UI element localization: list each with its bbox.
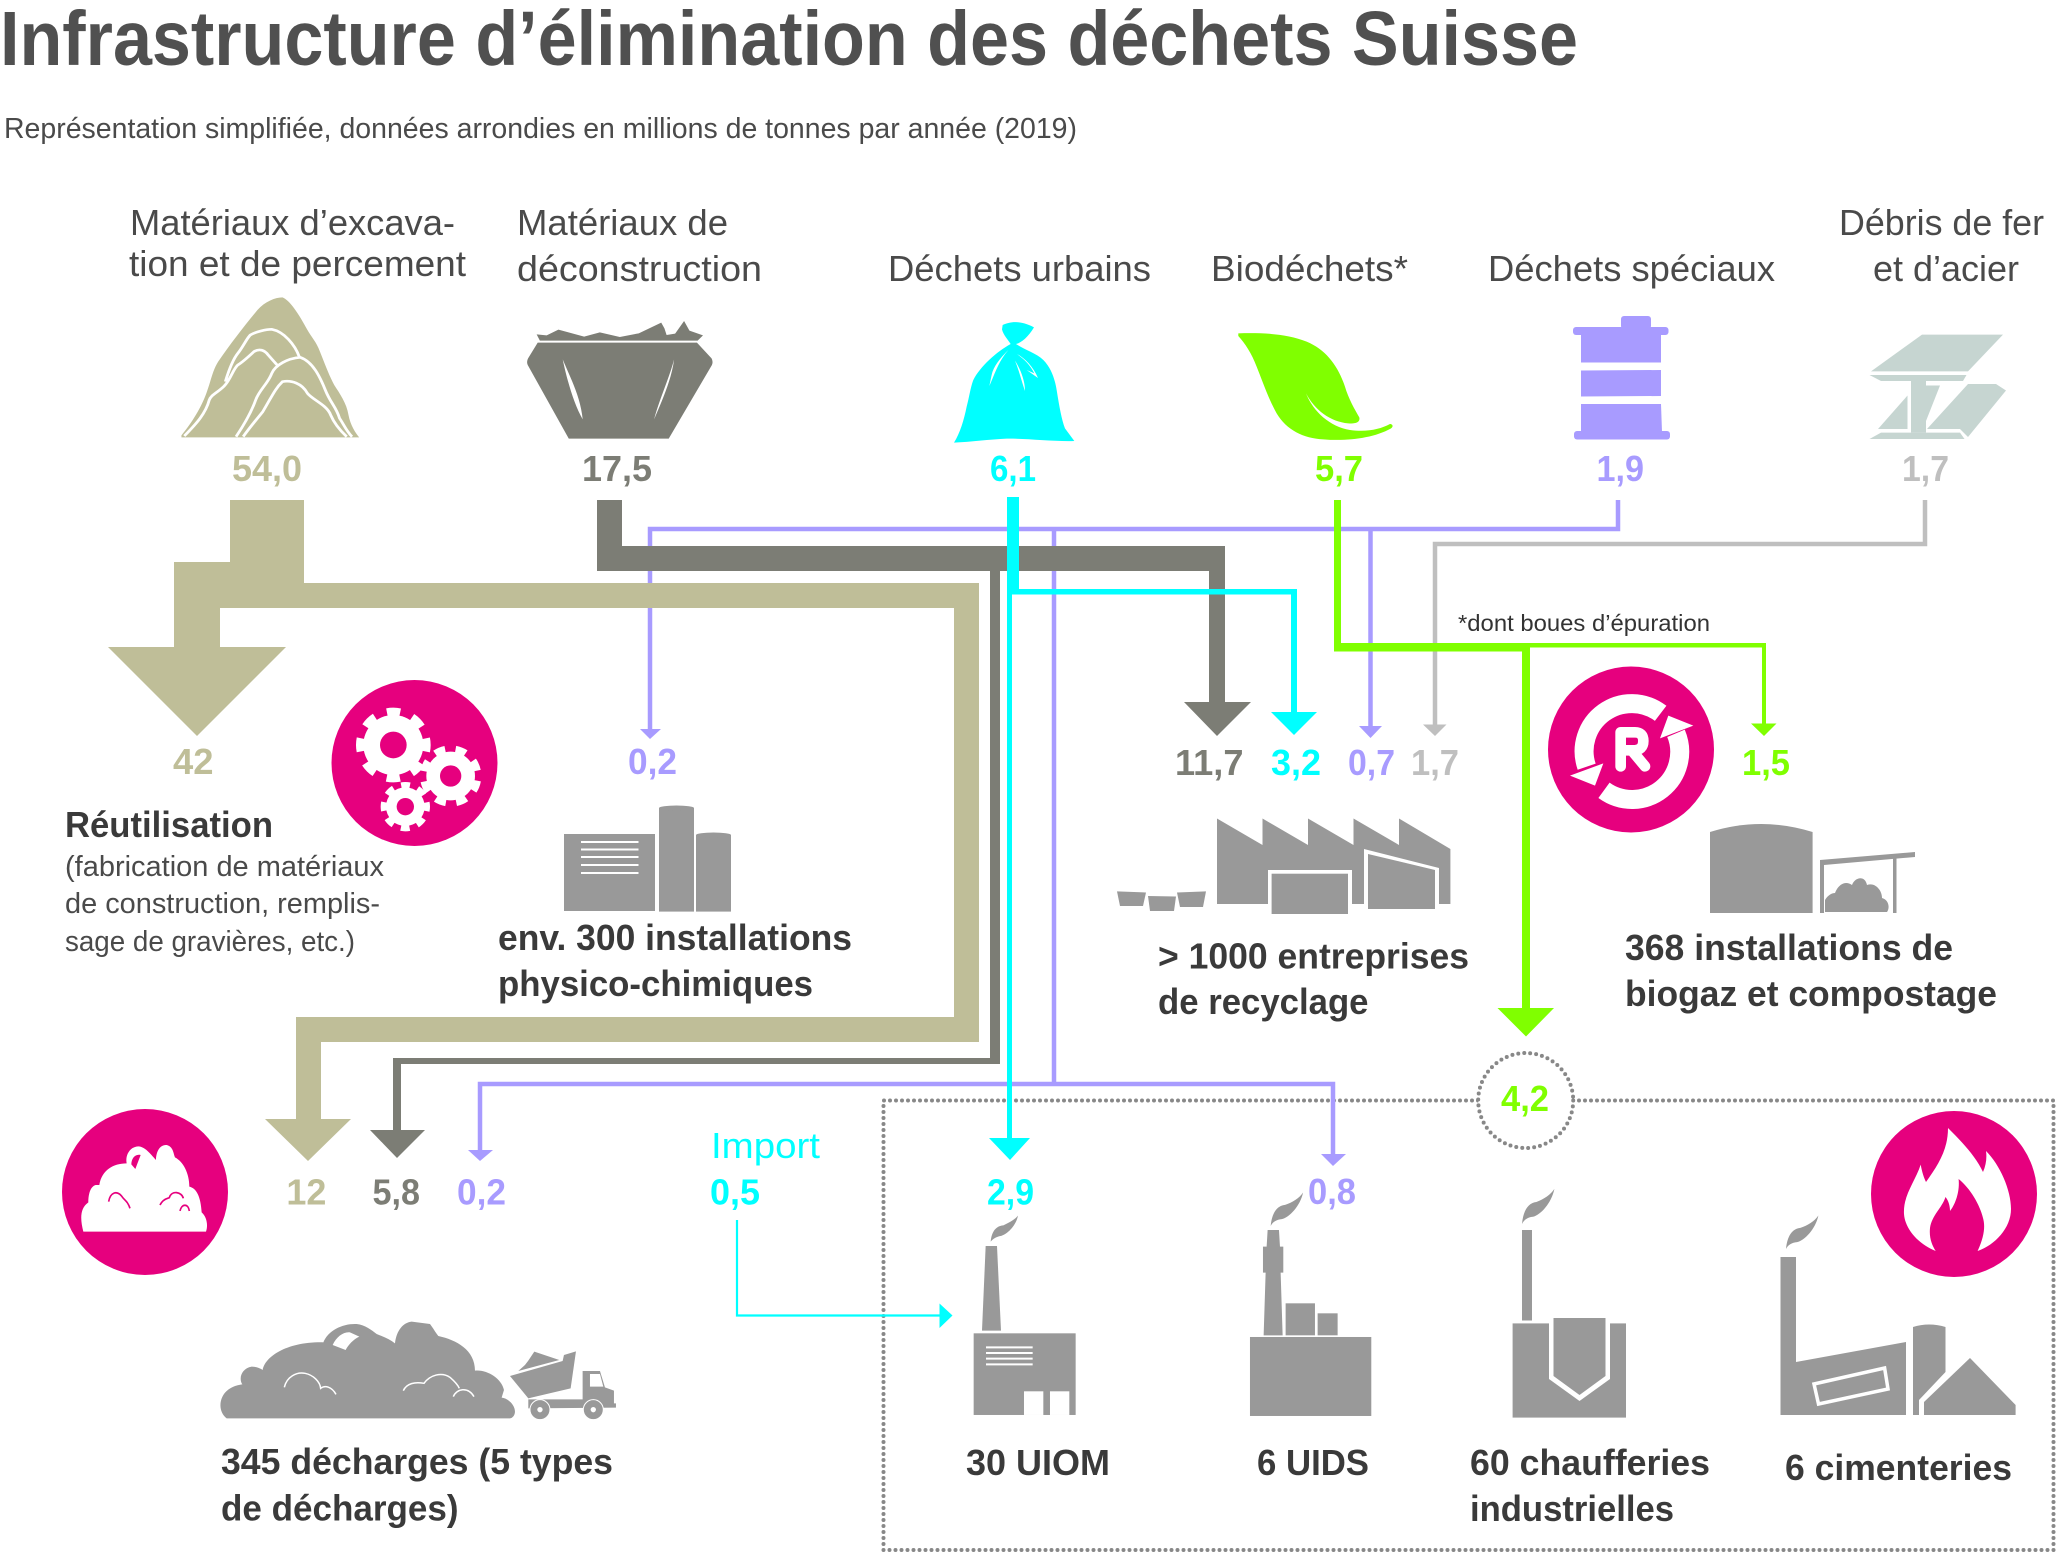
source: excavation materials: 54,0	[232, 448, 302, 489]
panel: industrial boilers	[1470, 1189, 1710, 1529]
flow arrow: deconstruction materials to landfill	[370, 571, 1000, 1158]
panel: recycling companies: 0,7	[1348, 742, 1395, 783]
icon: waste heap	[62, 1109, 228, 1275]
footnote: *dont boues d’épuration	[1458, 610, 1710, 636]
panel: biogas and composting: 1,5	[1742, 742, 1790, 783]
source: deconstruction materials: déconstruction	[517, 248, 762, 289]
panel: landfills: 0,2	[457, 1172, 506, 1212]
icon: boiler plant	[1513, 1189, 1626, 1418]
panel: physico-chemical plants: 0,2	[628, 741, 677, 782]
source: iron and steel scrap: et d’acier	[1873, 248, 2019, 289]
icon: leaf	[1238, 333, 1393, 440]
panel: UIOM: 30 UIOM	[966, 1442, 1110, 1483]
text block: reuse details: sage de gravières, etc.)	[65, 926, 355, 958]
panel: cement plants: 6 cimenteries	[1785, 1447, 2012, 1488]
text block: reuse details: (fabrication de matériaux	[65, 851, 384, 883]
panel: landfills: 5,8	[372, 1172, 420, 1212]
icon: chemical plant	[564, 806, 731, 912]
panel: recycling companies: de recyclage	[1158, 981, 1368, 1022]
panel: biogas and composting: 368 installations de	[1625, 927, 1953, 968]
panel: UIDS	[1250, 1171, 1371, 1483]
icon: mountain	[181, 297, 359, 437]
panel: landfills: 345 décharges (5 types	[221, 1441, 613, 1482]
panel: landfills: 12	[286, 1172, 326, 1212]
panel: UIDS: 6 UIDS	[1257, 1442, 1369, 1483]
panel: UIDS: 0,8	[1308, 1171, 1356, 1212]
panel: physico-chemical plants: env. 300 installations	[498, 917, 852, 958]
source: special waste: Déchets spéciaux	[1488, 248, 1775, 289]
source: deconstruction materials	[517, 202, 762, 489]
panel: recycling companies: 3,2	[1271, 742, 1321, 783]
source: special waste: 1,9	[1596, 448, 1644, 489]
subtitle: Représentation simplifiée, données arrondies en millions de tonnes par année (2019)	[4, 113, 1077, 145]
panel: reuse: 42	[173, 741, 214, 782]
source: biowaste: 5,7	[1315, 448, 1363, 489]
label: import	[710, 1125, 820, 1212]
flow arrow: import	[737, 1220, 952, 1328]
panel: reuse	[65, 680, 498, 958]
text block: reuse details	[65, 851, 384, 958]
source: urban waste	[888, 248, 1151, 489]
callout: thermal recovery 4,2: 4,2	[1501, 1078, 1549, 1119]
source: iron and steel scrap	[1839, 202, 2044, 489]
panel: recycling companies: 11,7	[1175, 742, 1244, 783]
source: biowaste	[1211, 248, 1408, 489]
panel: recycling companies: > 1000 entreprises	[1158, 936, 1469, 976]
source: biowaste: Biodéchets*	[1211, 248, 1408, 289]
panel: physico-chemical plants	[498, 741, 852, 1004]
flow arrow: excavation materials	[108, 500, 979, 1161]
flow arrows: special waste (lavender)	[468, 500, 1618, 1166]
panel: industrial boilers: 60 chaufferies	[1470, 1442, 1710, 1483]
source: deconstruction materials: Matériaux de	[517, 202, 728, 243]
source: special waste	[1488, 248, 1775, 489]
icon: skip container	[527, 321, 713, 439]
source: deconstruction materials: 17,5	[582, 448, 652, 489]
icon: garbage bag	[954, 322, 1074, 443]
icon: flame	[1871, 1111, 2037, 1277]
label: import: Import	[711, 1125, 820, 1166]
dotted frame: thermal treatment	[884, 1100, 2054, 1550]
label: import: 0,5	[710, 1172, 760, 1212]
source: excavation materials: Matériaux d’excava-	[130, 202, 455, 243]
icon: cement plant	[1780, 1215, 2016, 1415]
panel: landfills	[62, 1109, 616, 1528]
icon: barrel	[1573, 316, 1670, 440]
panel: reuse: Réutilisation	[65, 804, 273, 845]
panel: biogas and composting: biogaz et compostage	[1625, 973, 1997, 1014]
source: iron and steel scrap: Débris de fer	[1839, 202, 2044, 243]
panel: biogas and composting	[1548, 666, 1997, 1014]
panel: physico-chemical plants: physico-chimiques	[498, 963, 813, 1004]
flow arrow: biowaste	[1334, 500, 1776, 1036]
panel: recycling companies: 1,7	[1411, 742, 1459, 783]
flow arrow: deconstruction materials to recycling	[597, 500, 1251, 736]
callout: thermal recovery 4,2	[1478, 1053, 1573, 1148]
icon: incineration plant	[974, 1216, 1076, 1415]
source: urban waste: Déchets urbains	[888, 248, 1151, 289]
icon: biogas tank and compost shed	[1710, 824, 1915, 913]
panel: UIOM	[966, 1172, 1110, 1483]
flow arrow: iron and steel scrap	[1423, 500, 1925, 736]
panel: recycling companies	[1117, 742, 1469, 1022]
panel: UIOM: 2,9	[987, 1172, 1034, 1212]
icon: recycling factory with bins	[1117, 818, 1450, 914]
icon: landfill and dump truck	[220, 1322, 616, 1420]
panel: landfills: de décharges)	[221, 1488, 458, 1528]
source: excavation materials: tion et de percement	[129, 243, 466, 284]
flow arrow: urban waste	[989, 497, 1317, 1160]
source: urban waste: 6,1	[990, 448, 1036, 489]
panel: cement plants	[1780, 1111, 2037, 1488]
icon: steel beam and plates	[1870, 335, 2006, 439]
text block: reuse details: de construction, remplis-	[65, 888, 380, 920]
source: excavation materials	[129, 202, 466, 489]
icon: gears	[332, 680, 498, 846]
icon: recycling R	[1548, 666, 1714, 832]
icon: special waste incinerator	[1250, 1192, 1371, 1416]
source: iron and steel scrap: 1,7	[1902, 448, 1949, 489]
panel: industrial boilers: industrielles	[1470, 1488, 1674, 1529]
